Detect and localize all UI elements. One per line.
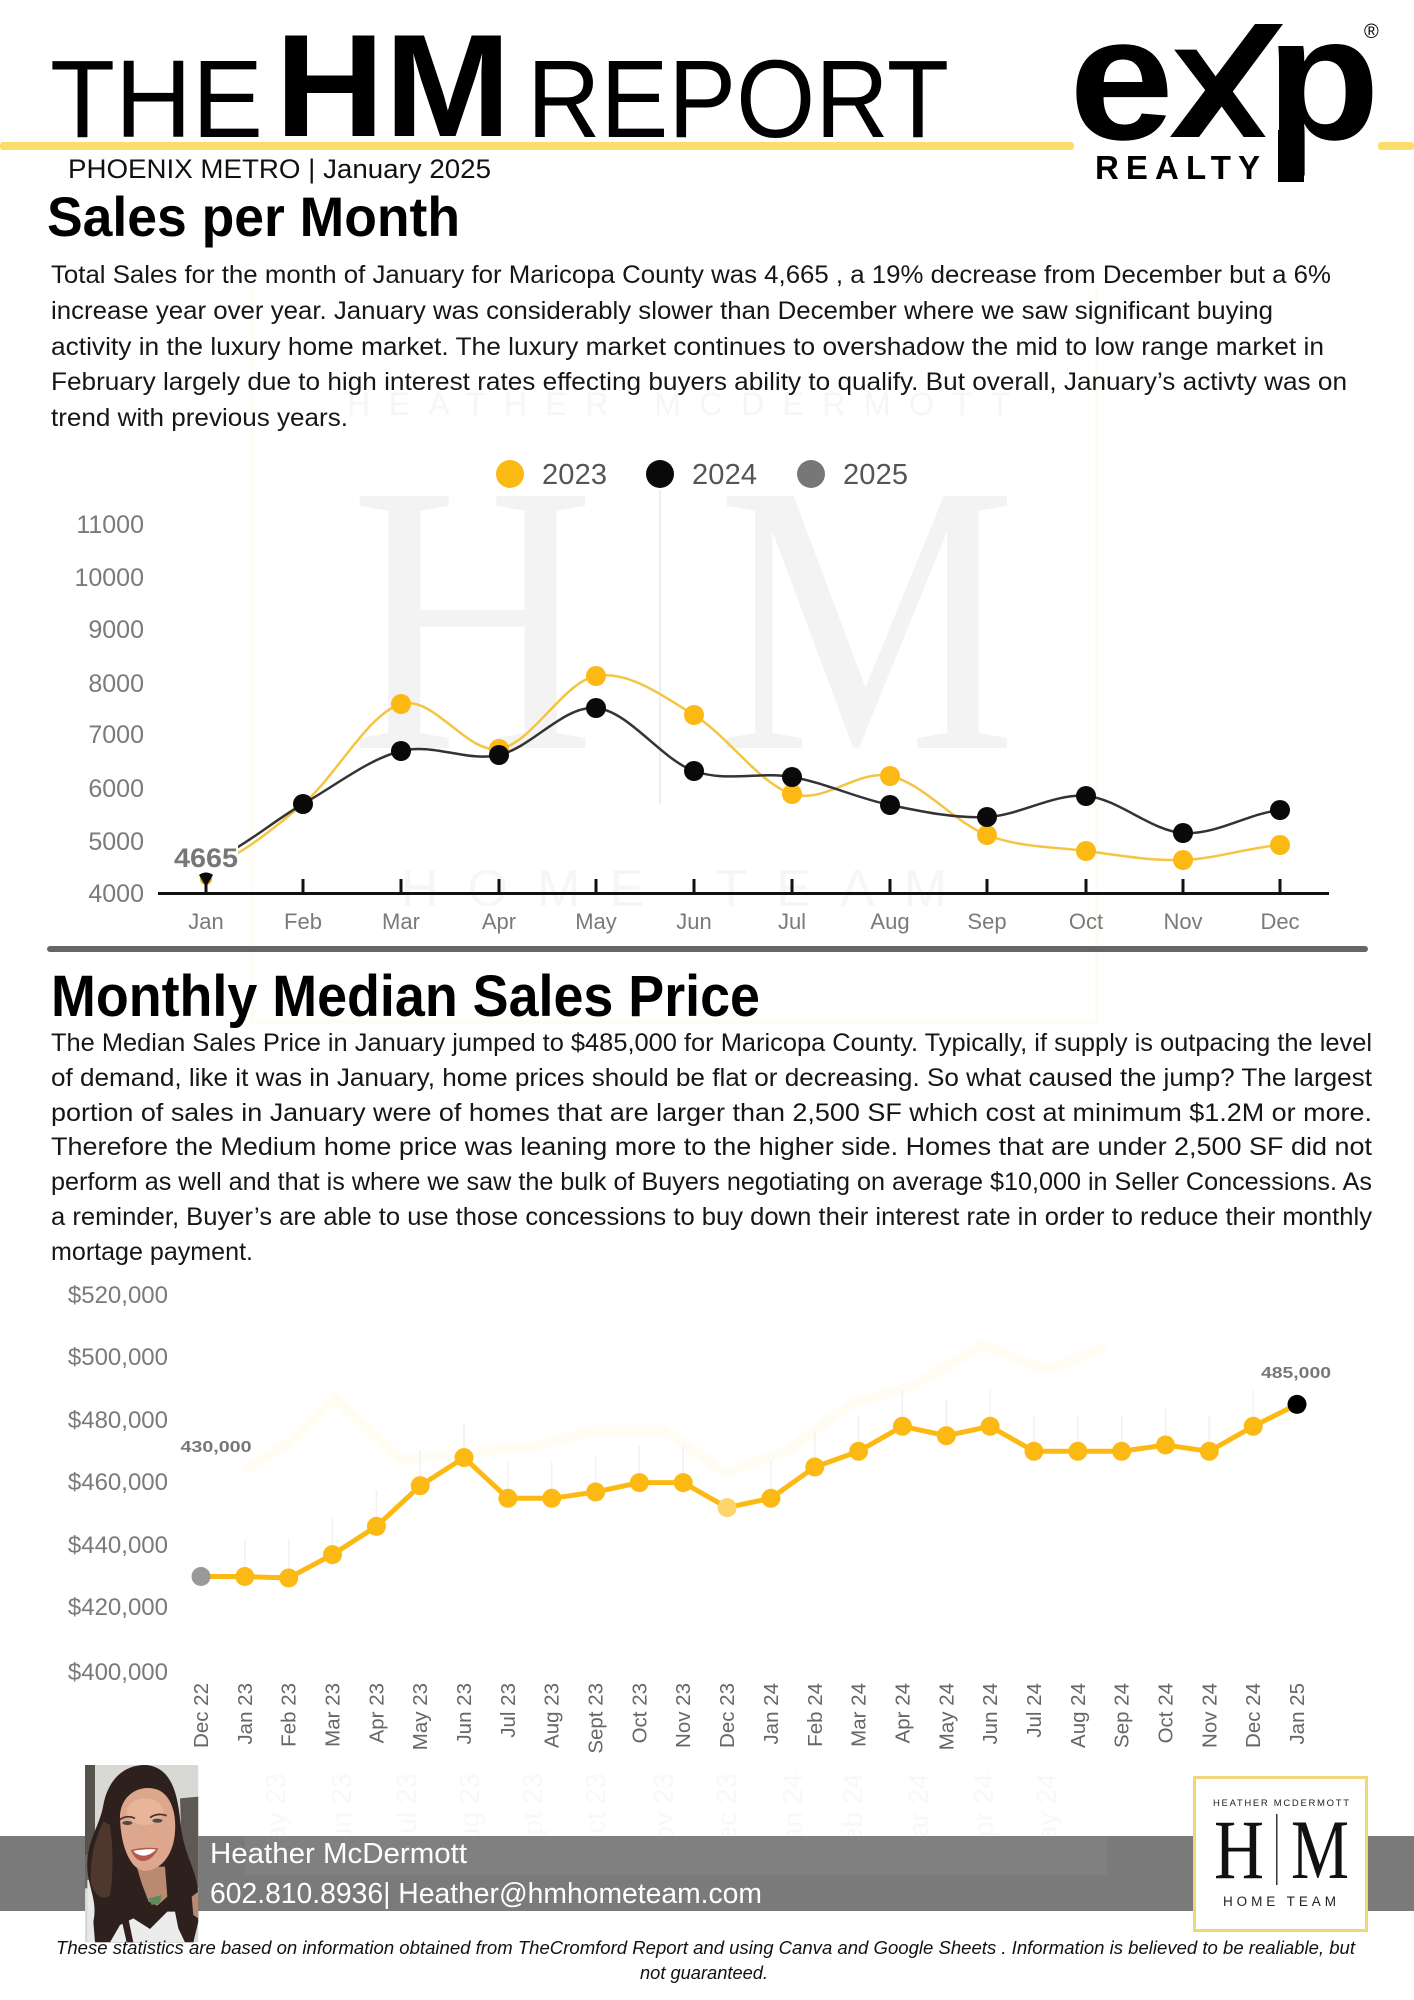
HM Home Team logo: HEATHER MCDERMOTT xyxy=(1213,1798,1349,1809)
y axis labels: $520,000 xyxy=(68,1282,168,1309)
value callouts xyxy=(180,1365,1331,1456)
x axis labels: Mar 23 xyxy=(322,1683,344,1747)
month labels: Dec xyxy=(1260,909,1300,934)
text block: median price summary: Therefore the Medium home price was leaning more to the higher side. Homes that are under 2,500 SF did not xyxy=(51,1133,1372,1161)
y axis labels: 7000 xyxy=(88,721,144,749)
y axis labels: $460,000 xyxy=(68,1469,168,1496)
line chart: monthly median sales price xyxy=(68,1282,1331,1870)
x axis labels: May 24 xyxy=(935,1683,958,1750)
agent contact details: 602.810.8936| Heather@hmhometeam.com xyxy=(210,1878,762,1910)
y axis labels: 5000 xyxy=(88,828,144,856)
text block: median price summary: portion of sales in January were of homes that are larger than 2,500 SF which cost at minimum $1.2M or more. xyxy=(51,1099,1372,1127)
text block: sales summary xyxy=(51,261,1347,432)
y axis labels: $480,000 xyxy=(68,1407,168,1434)
x axis labels: Jun 23 xyxy=(453,1683,476,1745)
data points xyxy=(192,1395,1306,1588)
text block: median price summary: a reminder, Buyer’s are able to use those concessions to buy down their interest rate in order to reduce their monthly xyxy=(51,1203,1373,1231)
faded background line xyxy=(245,1345,1105,1473)
faded label ghosts: Mar 24 xyxy=(903,1773,934,1860)
x axis labels: Apr 23 xyxy=(365,1683,388,1743)
faded label ghosts: May 23 xyxy=(260,1773,291,1865)
legend xyxy=(496,459,908,491)
y axis labels: $400,000 xyxy=(68,1659,168,1686)
y axis labels: $440,000 xyxy=(68,1532,168,1559)
y axis labels: $420,000 xyxy=(68,1594,168,1621)
month labels: Apr xyxy=(482,909,516,934)
background watermark: HM Home Team: H xyxy=(350,406,595,832)
x axis labels: Dec 22 xyxy=(190,1683,213,1748)
faded label ghosts: Sept 23 xyxy=(517,1773,548,1870)
x axis labels: Oct 24 xyxy=(1154,1683,1178,1743)
text block: median price summary xyxy=(51,1029,1373,1266)
drop lines xyxy=(245,1390,1253,1576)
value callouts: 485,000 xyxy=(1261,1365,1331,1382)
x axis labels: Feb 24 xyxy=(804,1683,827,1747)
y axis labels: 11000 xyxy=(76,511,144,539)
HM Home Team logo xyxy=(1194,1778,1366,1930)
text block: median price summary: perform as well and that is where we saw the bulk of Buyers negotiating on average $10,000 in Seller Concessions. As xyxy=(51,1168,1372,1196)
x axis labels: Apr 24 xyxy=(891,1683,914,1743)
text block: sales summary: February largely due to high interest rates effecting buyers ability to qualify. But overall, January’s activty was on xyxy=(51,368,1347,396)
month labels xyxy=(188,909,1300,934)
heading: Sales per Month: Sales per Month xyxy=(47,185,460,248)
x axis labels: Jul 23 xyxy=(497,1683,520,1738)
faded label ghosts: Jun 23 xyxy=(326,1773,357,1857)
text block: sales summary: trend with previous years. xyxy=(51,404,348,432)
y axis labels: 8000 xyxy=(88,670,144,698)
month labels: Oct xyxy=(1069,909,1103,934)
faded label ghosts: Jul 23 xyxy=(391,1773,422,1848)
month labels: Jan xyxy=(188,909,224,934)
x axis labels: Sept 23 xyxy=(585,1683,608,1754)
month labels: Mar xyxy=(382,909,420,934)
yellow header rule xyxy=(0,142,1414,150)
text block: median price summary: mortage payment. xyxy=(51,1238,253,1266)
faded label ghosts: Oct 23 xyxy=(580,1773,611,1855)
legend: 2023 xyxy=(542,459,607,491)
background watermark: HM Home Team: M xyxy=(717,406,1017,832)
month labels: Sep xyxy=(967,909,1007,934)
x axis labels: Aug 24 xyxy=(1067,1683,1090,1748)
HM Home Team logo: HOME TEAM xyxy=(1223,1894,1336,1909)
text block: sales summary: increase year over year. January was considerably slower than December where we saw significant buying xyxy=(51,297,1273,325)
faded label ghosts: Feb 24 xyxy=(837,1773,868,1860)
x axis labels: Jul 24 xyxy=(1023,1683,1046,1738)
agent contact details xyxy=(210,1838,762,1910)
y axis labels: 10000 xyxy=(74,564,144,592)
footnote disclaimer xyxy=(56,1937,1356,1983)
footnote disclaimer: not guaranteed. xyxy=(640,1962,768,1983)
title: The HM Report: THE xyxy=(50,38,263,161)
y axis labels: 6000 xyxy=(88,775,144,803)
agent contact details: Heather McDermott xyxy=(210,1838,467,1870)
text block: sales summary: Total Sales for the month of January for Maricopa County was 4,665 , a 19% decrease from December but a 6% xyxy=(51,261,1331,289)
section divider xyxy=(47,946,1368,952)
x axis labels: Aug 23 xyxy=(541,1683,564,1748)
month labels: Jun xyxy=(676,909,712,934)
x axis labels: Jun 24 xyxy=(979,1683,1002,1745)
y axis labels: 9000 xyxy=(88,616,144,644)
faded label ghosts: Jan 24 xyxy=(777,1773,808,1857)
background watermark: HM Home Team: HOME TEAM xyxy=(401,860,947,918)
HM Home Team logo: M xyxy=(1291,1803,1349,1897)
x axis labels: Oct 23 xyxy=(628,1683,651,1743)
background watermark: HM Home Team: HEATHER MCDERMOTT xyxy=(347,386,1010,422)
faded label ghosts: Apr 24 xyxy=(968,1773,999,1856)
heading: Monthly Median Sales Price: Monthly Median Sales Price xyxy=(51,964,760,1029)
month labels: Nov xyxy=(1163,909,1203,934)
x axis labels: Nov 23 xyxy=(672,1683,695,1748)
title: The HM Report xyxy=(50,4,949,167)
text block: median price summary: of demand, like it was in January, home prices should be flat or decreasing. So what caused the jump? The largest xyxy=(51,1064,1372,1092)
subtitle: PHOENIX METRO | January 2025 xyxy=(68,154,491,184)
logo: eXp Realty: ® xyxy=(1364,21,1379,43)
agent portrait xyxy=(85,1765,198,1942)
x axis labels: Dec 23 xyxy=(716,1683,739,1748)
x axis labels xyxy=(190,1683,1309,1754)
faded label ghosts xyxy=(260,1773,1062,1870)
y axis labels xyxy=(74,511,144,908)
x axis labels: May 23 xyxy=(409,1683,432,1750)
legend: 2024 xyxy=(692,459,757,491)
January 2025 data point and label xyxy=(170,838,238,887)
series 2023 xyxy=(206,666,1290,870)
x axis labels: Jan 24 xyxy=(760,1683,783,1745)
title: The HM Report: REPORT xyxy=(527,38,949,161)
January 2025 data point and label: 4665 xyxy=(174,843,238,873)
median price line xyxy=(201,1404,1297,1578)
footer contact band xyxy=(0,1836,1414,1911)
series 2024 xyxy=(206,698,1290,862)
logo: eXp Realty: X xyxy=(1170,22,1267,164)
y axis labels: 4000 xyxy=(88,880,144,908)
faded label ghosts: Aug 23 xyxy=(454,1773,485,1862)
x axis labels: Dec 24 xyxy=(1242,1683,1265,1748)
footnote disclaimer: These statistics are based on information obtained from TheCromford Report and using Canva and Google Sheets . Information is believed to be realiable, but xyxy=(56,1937,1356,1958)
y axis labels: $500,000 xyxy=(68,1344,168,1371)
faded label ghosts: May 24 xyxy=(1031,1773,1062,1865)
logo: eXp Realty: REALTY xyxy=(1095,149,1260,186)
title: The HM Report: HM xyxy=(275,4,511,167)
faded label ghosts: Nov 23 xyxy=(648,1773,679,1862)
x axis labels: Feb 23 xyxy=(278,1683,301,1747)
line chart: sales per month xyxy=(74,459,1329,934)
x axis with ticks xyxy=(158,879,1329,894)
x axis labels: Jan 23 xyxy=(234,1683,257,1745)
month labels: May xyxy=(575,909,617,934)
x axis labels: Sep 24 xyxy=(1111,1683,1134,1748)
month labels: Feb xyxy=(284,909,322,934)
logo: eXp Realty xyxy=(1069,0,1380,186)
value callouts: 430,000 xyxy=(180,1439,252,1456)
x axis labels: Nov 24 xyxy=(1198,1683,1221,1748)
month labels: Jul xyxy=(778,909,806,934)
faded label ghosts: Dec 23 xyxy=(711,1773,742,1862)
legend: 2025 xyxy=(843,459,908,491)
x axis labels: Jan 25 xyxy=(1286,1683,1309,1745)
y axis labels xyxy=(68,1282,168,1686)
HM Home Team logo: H xyxy=(1214,1803,1264,1897)
month labels: Aug xyxy=(870,909,910,934)
x axis labels: Mar 24 xyxy=(848,1683,871,1747)
background watermark: HM Home Team xyxy=(252,285,1097,1022)
text block: median price summary: The Median Sales Price in January jumped to $485,000 for Maricopa County. Typically, if supply is outpacing the level xyxy=(51,1029,1372,1057)
text block: sales summary: activity in the luxury home market. The luxury market continues to overshadow the mid to low range market in xyxy=(51,333,1324,361)
